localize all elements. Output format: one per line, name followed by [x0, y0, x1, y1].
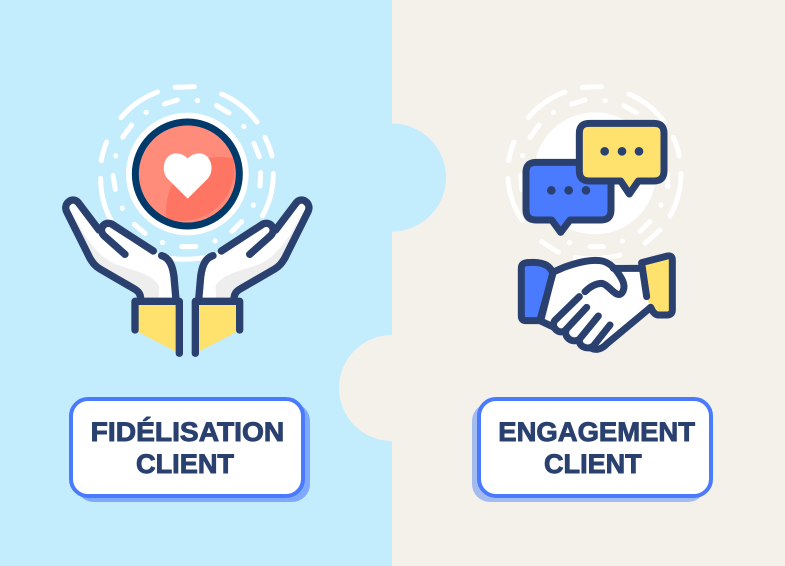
label box: fidélisation client: CLIENT [136, 449, 235, 479]
white disc and dashed rings [508, 87, 681, 259]
label box: engagement client: CLIENT [544, 449, 642, 479]
left hand and cuff [66, 200, 179, 353]
yellow speech bubble [579, 123, 664, 194]
label box: fidélisation client [71, 399, 310, 502]
panel: blue left half with puzzle tab [0, 0, 446, 566]
label box: fidélisation client: FIDÉLISATION [91, 416, 284, 447]
handshake [521, 256, 672, 349]
label box: engagement client: ENGAGEMENT [498, 417, 696, 447]
label box: engagement client [472, 399, 711, 502]
icon: hands holding heart [66, 87, 309, 353]
puzzle notch: beige tab [339, 335, 445, 441]
icon: speech bubbles and handshake [508, 87, 681, 349]
blue speech bubble [526, 162, 611, 232]
right hand and cuff [195, 200, 309, 353]
heart medallion [126, 113, 249, 235]
white dashed rings [101, 87, 273, 259]
